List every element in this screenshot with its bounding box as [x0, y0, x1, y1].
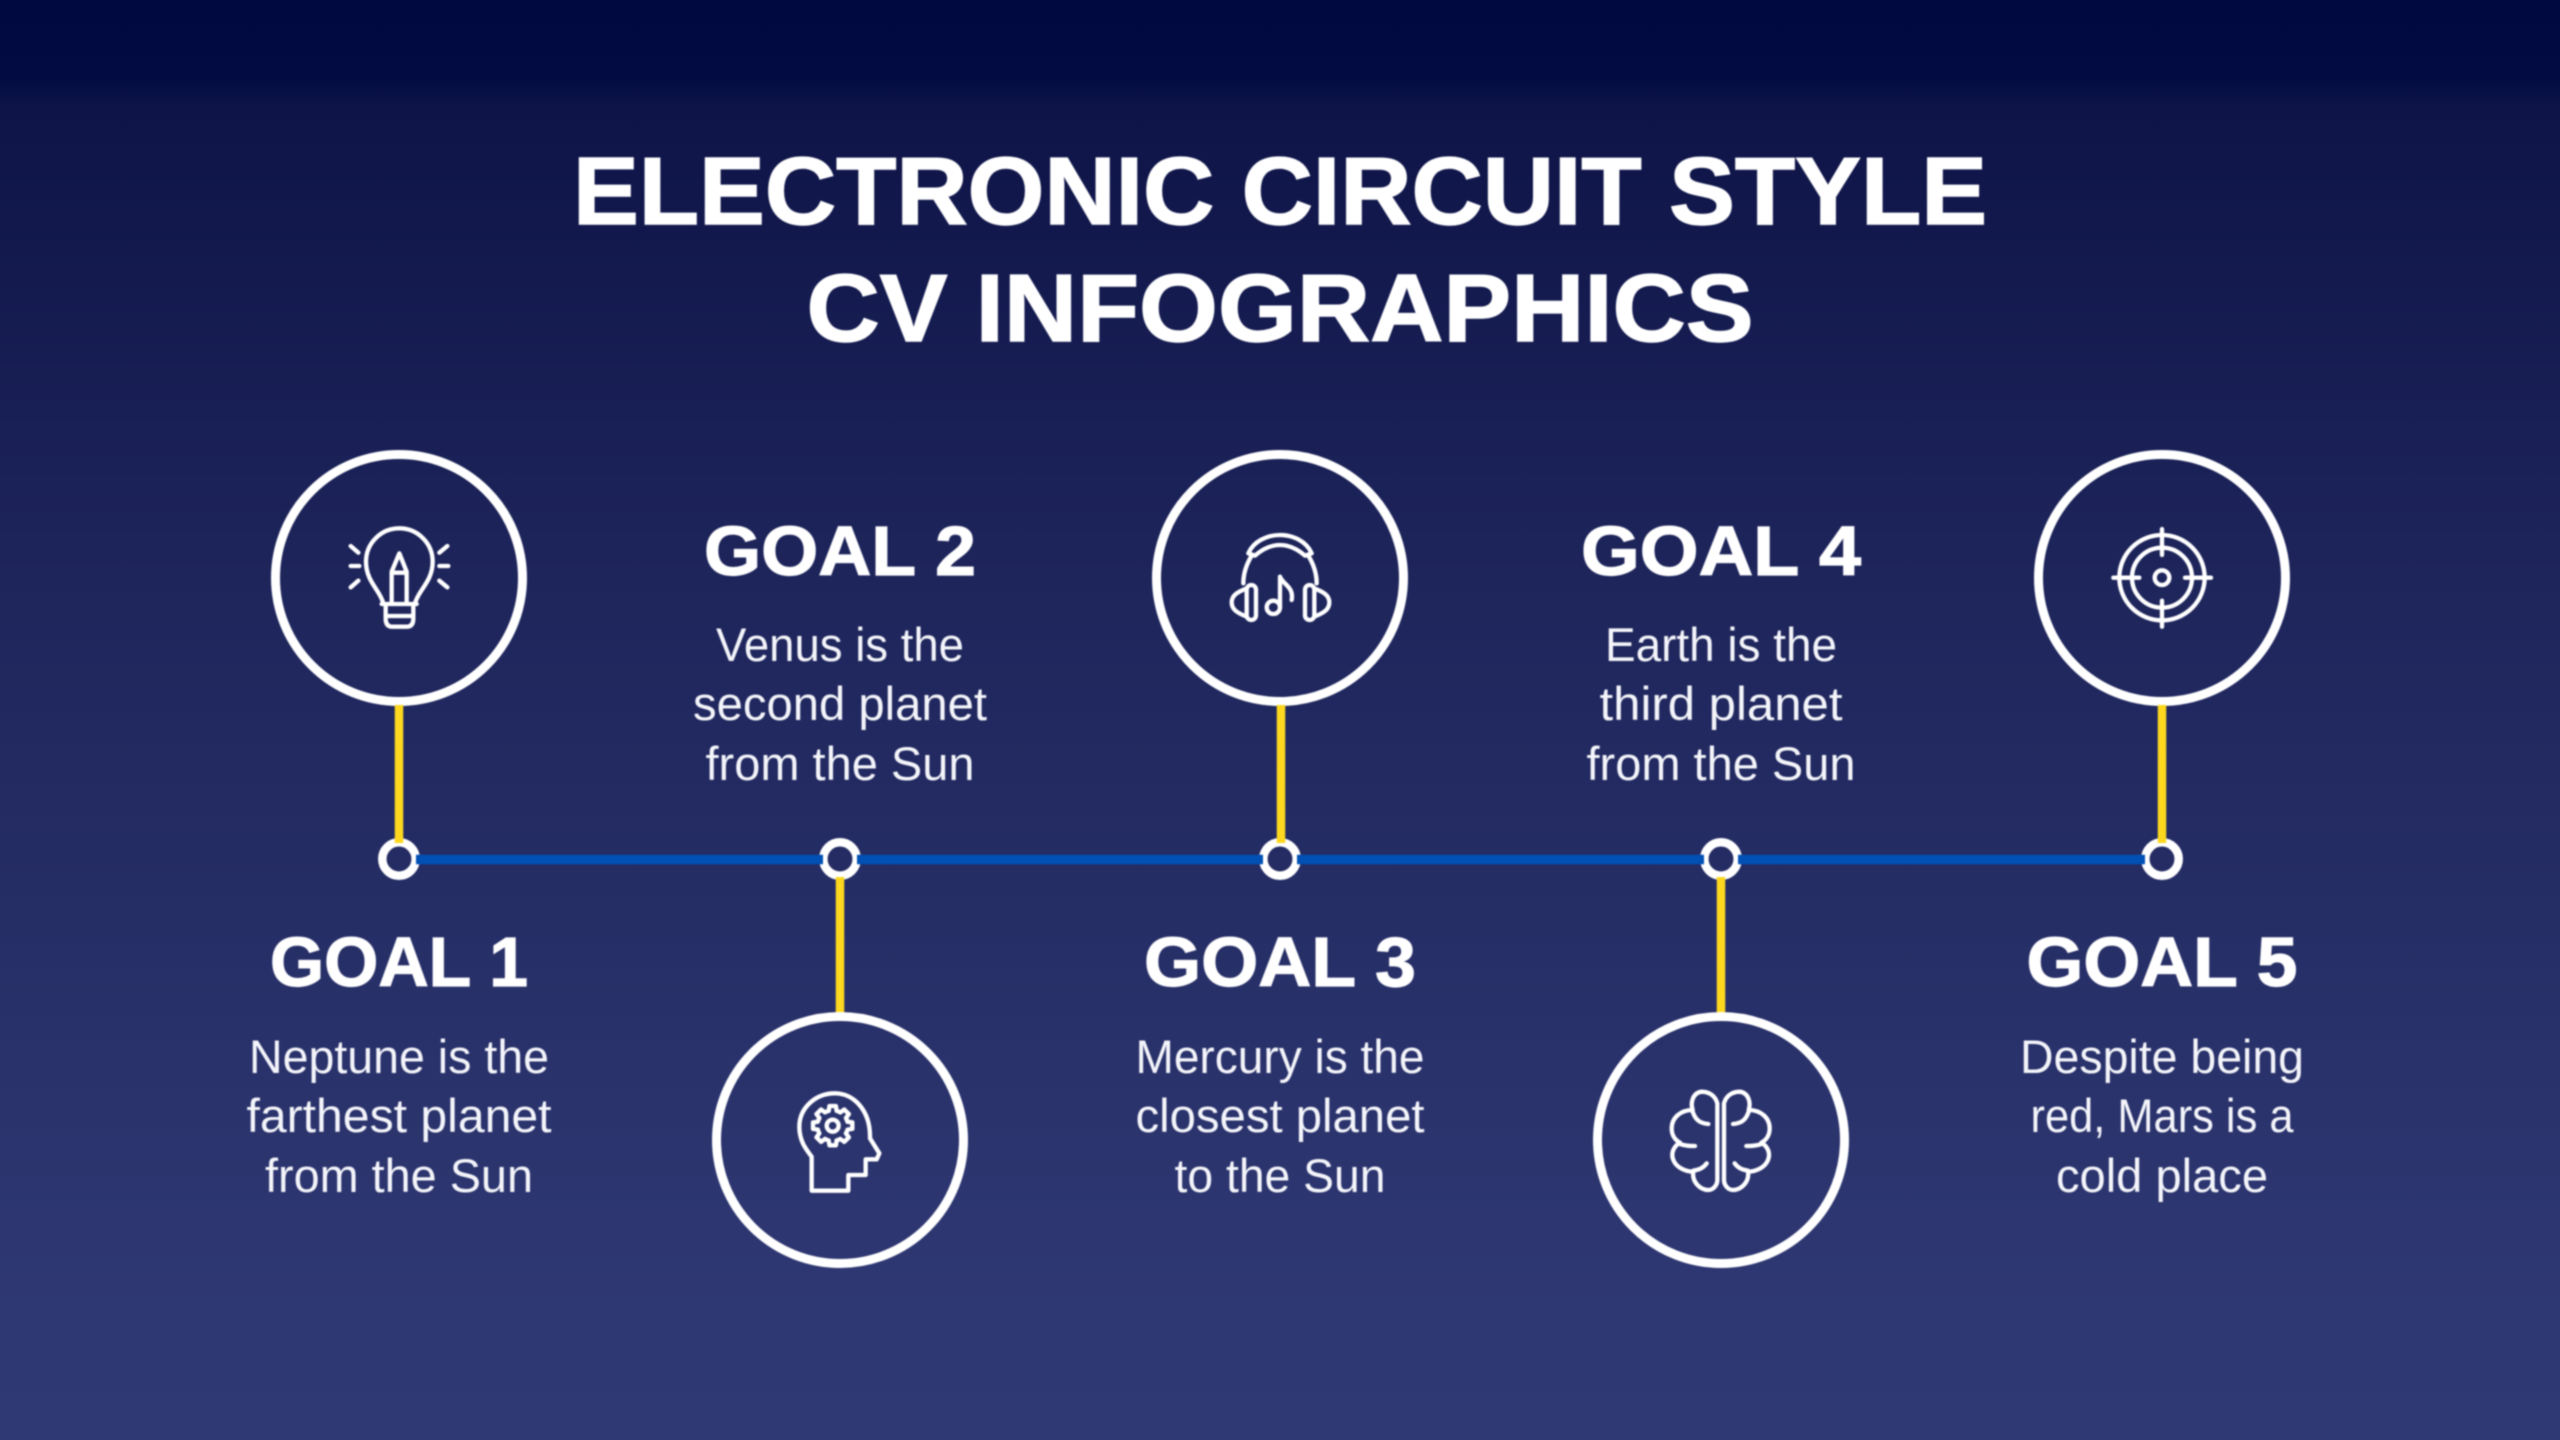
goal 5 text: cold place — [2056, 1149, 2268, 1202]
goal 5 text: red, Mars is a — [2030, 1089, 2294, 1142]
goal 1 text — [246, 1030, 552, 1202]
goal 5 heading: GOAL 5 — [2026, 923, 2298, 1001]
goal 3 panel — [1136, 454, 1424, 1202]
goal 5 node — [2145, 842, 2179, 876]
goal 1 circle with lightbulb icon — [276, 454, 522, 702]
goal 3 text: closest planet — [1136, 1089, 1424, 1142]
title: CV INFOGRAPHICS — [806, 255, 1754, 362]
goal 3 stem — [1277, 705, 1285, 843]
goal 4 circle with brain icon — [1598, 1016, 1844, 1264]
goal 4 stem — [1717, 877, 1725, 1014]
goal 1 heading: GOAL 1 — [270, 923, 528, 1001]
goal 1 panel — [246, 454, 552, 1202]
goal 2 node — [823, 842, 857, 876]
goal 5 panel — [2020, 454, 2304, 1202]
goal 3 circle with headphones icon — [1156, 454, 1404, 702]
goal 5 text — [2020, 1030, 2304, 1202]
goal 2 circle with head and gear icon — [716, 1016, 964, 1264]
goal 4 text: from the Sun — [1586, 737, 1856, 790]
goal 3 text: Mercury is the — [1136, 1030, 1424, 1083]
goal 1 stem — [395, 705, 403, 843]
goal 2 text — [693, 618, 987, 790]
goal 2 text: from the Sun — [706, 737, 974, 790]
goal 3 text — [1136, 1030, 1424, 1202]
title — [573, 138, 1987, 362]
goal 1 text: farthest planet — [246, 1089, 552, 1142]
goal 1 text: Neptune is the — [249, 1030, 549, 1083]
goal 4 node — [1704, 842, 1738, 876]
goal 1 node — [382, 842, 416, 876]
goal 3 heading: GOAL 3 — [1144, 923, 1416, 1001]
goal 3 text: to the Sun — [1174, 1149, 1386, 1202]
title: ELECTRONIC CIRCUIT STYLE — [573, 138, 1987, 245]
goal 2 panel — [693, 512, 987, 1264]
goal 4 heading: GOAL 4 — [1581, 512, 1861, 590]
goal 5 text: Despite being — [2020, 1030, 2304, 1083]
goal 1 text: from the Sun — [265, 1149, 533, 1202]
goal 2 heading: GOAL 2 — [704, 512, 976, 590]
goal 5 stem — [2158, 705, 2166, 843]
goal 4 text: Earth is the — [1605, 618, 1837, 671]
goal 2 stem — [836, 877, 844, 1014]
goal 2 text: second planet — [693, 677, 987, 730]
timeline: blue connector line — [416, 855, 2145, 864]
goal 4 panel — [1581, 512, 1861, 1264]
goal 3 node — [1263, 842, 1297, 876]
goal 2 text: Venus is the — [716, 618, 964, 671]
goal 4 text: third planet — [1600, 677, 1842, 730]
goal 4 text — [1586, 618, 1856, 790]
goal 5 circle with target icon — [2038, 454, 2286, 702]
